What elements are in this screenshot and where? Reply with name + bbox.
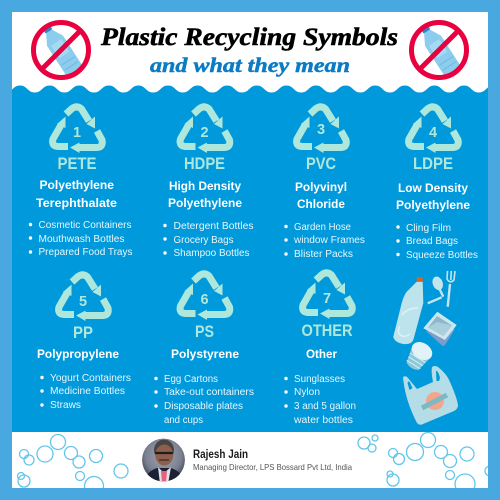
subtitle: and what they mean: [150, 53, 350, 77]
plastic name: Low Density: [398, 181, 468, 195]
resin code PVC: PVC: [306, 155, 336, 173]
examples list: Bread Bags: [406, 236, 458, 247]
examples list: Grocery Bags: [174, 235, 234, 246]
examples list: Take-out containers: [164, 387, 254, 398]
plastic name: [168, 179, 242, 210]
examples list: [284, 374, 356, 426]
resin code OTHER: OTHER: [302, 322, 353, 340]
icon: no plastic bottle right: [412, 22, 466, 78]
examples list: and cups: [164, 415, 203, 426]
panel: 4 LDPE: [396, 107, 478, 261]
examples list: Blister Packs: [294, 249, 353, 260]
panel: 6 PS: [154, 274, 254, 426]
plastic name: Other: [306, 347, 337, 361]
resin code PP: PP: [73, 324, 93, 342]
plastic name: Polyethylene: [168, 196, 242, 210]
icon: plastic spoon and fork: [428, 271, 455, 307]
icon: recycling symbol 2: [180, 107, 230, 153]
footer bubbles right: [357, 432, 488, 488]
examples list: Detergent Bottles: [174, 221, 254, 232]
title: Plastic Recycling Symbols: [100, 24, 398, 51]
examples list: window Frames: [293, 235, 365, 246]
icon: recycling symbol 4: 4: [429, 125, 437, 141]
icon: recycling symbol 7: [303, 273, 352, 319]
icon: recycling symbol 1: [53, 107, 102, 153]
icon: recycling symbol 3: 3: [317, 122, 325, 138]
plastic name: Polystyrene: [171, 347, 239, 361]
icon: recycling symbol 7: 7: [323, 291, 331, 307]
icon: recycling symbol 5: 5: [79, 294, 87, 310]
icon: plastic bag: [403, 366, 458, 425]
panel: 7 OTHER: [284, 273, 356, 426]
examples list: Shampoo Bottles: [174, 248, 250, 259]
plastic name: Chloride: [297, 197, 345, 211]
footer role: Managing Director, LPS Bossard Pvt Ltd, India: [193, 462, 352, 472]
panel: 1 PETE: [29, 107, 132, 258]
icon: recycling symbol 3: [297, 107, 346, 153]
icon: plastic bottle: [393, 277, 423, 344]
blue wave panel background: [5, 86, 494, 432]
examples list: Cosmetic Containers: [38, 220, 132, 231]
portrait of Rajesh Jain: [142, 438, 186, 484]
icon: recycling symbol 6: 6: [200, 292, 209, 308]
icon: recycling symbol 1: 1: [73, 125, 81, 141]
plastic name: Terephthalate: [36, 196, 117, 210]
illustration: plastic waste items: [393, 271, 458, 425]
resin code PETE: PETE: [58, 155, 96, 173]
panel: 2 HDPE: [163, 107, 254, 259]
examples list: Yogurt Containers: [50, 373, 131, 384]
examples list: Medicine Bottles: [50, 386, 125, 397]
plastic name: Polypropylene: [37, 347, 119, 361]
examples list: 3 and 5 gallon: [294, 401, 356, 412]
examples list: [40, 373, 131, 411]
examples list: [154, 374, 254, 426]
footer name: Rajesh Jain: [193, 449, 248, 461]
resin code PS: PS: [195, 323, 214, 341]
panel: 5 PP: [37, 275, 131, 411]
icon: no plastic bottle left: [34, 22, 88, 78]
footer bubbles left: [18, 434, 128, 496]
examples list: Disposable plates: [164, 401, 243, 412]
examples list: Mouthwash Bottles: [38, 234, 124, 245]
examples list: Sunglasses: [294, 374, 345, 385]
resin code LDPE: LDPE: [413, 155, 453, 173]
plastic name: [36, 178, 117, 210]
plastic name: Polyethylene: [396, 198, 470, 212]
examples list: [284, 222, 365, 260]
icon: plastic tray: [423, 312, 457, 346]
examples list: Cling Film: [406, 223, 451, 234]
plastic name: High Density: [169, 179, 241, 193]
icon: recycling symbol 6: [180, 274, 230, 320]
examples list: [163, 221, 254, 259]
examples list: Nylon: [294, 387, 320, 398]
examples list: Squeeze Bottles: [406, 250, 478, 261]
resin code HDPE: HDPE: [184, 155, 225, 173]
icon: recycling symbol 2: 2: [200, 125, 209, 141]
examples list: Garden Hose: [294, 222, 351, 233]
examples list: [396, 223, 478, 261]
examples list: [29, 220, 132, 258]
panel: 3 PVC: [284, 107, 365, 260]
examples list: Straws: [50, 400, 81, 411]
examples list: Prepared Food Trays: [38, 247, 132, 258]
plastic name: Polyethylene: [40, 178, 114, 192]
examples list: Egg Cartons: [164, 374, 218, 385]
examples list: water bottles: [293, 415, 353, 426]
plastic name: [396, 181, 470, 212]
icon: plastic cup: [402, 338, 436, 374]
icon: recycling symbol 4: [409, 107, 458, 153]
plastic name: [295, 180, 347, 211]
plastic name: Polyvinyl: [295, 180, 347, 194]
